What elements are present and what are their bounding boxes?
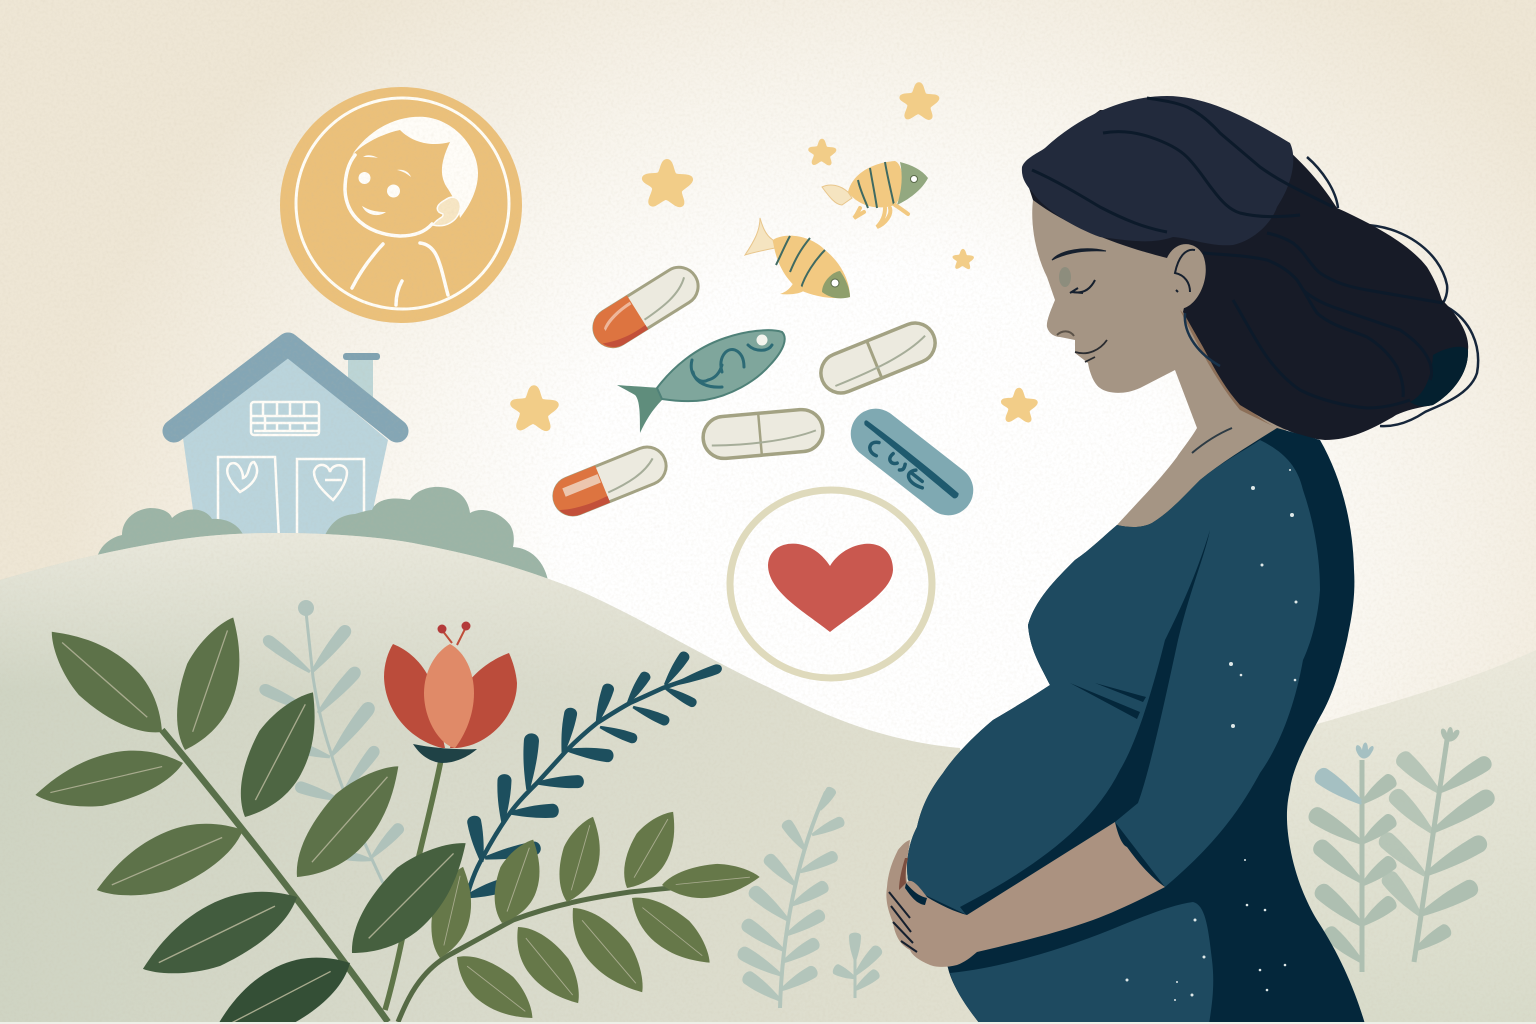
- stripes: [858, 162, 894, 208]
- flower stem: [385, 760, 441, 1010]
- hair bun dark end: [1410, 347, 1468, 406]
- earring: [1185, 313, 1220, 366]
- pregnant woman: [886, 96, 1478, 1024]
- left foreground hill: [0, 533, 1000, 1024]
- attic window: [251, 402, 319, 435]
- fish body: [657, 330, 785, 401]
- baby shoulders: [352, 243, 448, 305]
- body: [848, 161, 902, 207]
- bottom edge strip: [0, 1022, 1536, 1024]
- body: [773, 236, 850, 298]
- dress chest belly and sleeve: [907, 440, 1320, 915]
- collarbone: [1192, 428, 1232, 453]
- roof: [174, 344, 397, 431]
- left petal: [384, 644, 445, 748]
- blue pill: [841, 399, 983, 525]
- thumb shadow: [905, 883, 927, 905]
- dress dark sleeve fold: [960, 530, 1210, 916]
- fish gill marks: [691, 345, 772, 387]
- neck and face: [1032, 200, 1290, 540]
- hill crest highlight: [0, 533, 770, 690]
- house wall: [183, 356, 388, 560]
- back hair: [1022, 110, 1468, 440]
- right door with heart: [297, 459, 364, 540]
- right bush: [323, 487, 549, 590]
- white capsule middle: [701, 408, 825, 460]
- green fish: [617, 330, 785, 433]
- dress lower panel: [950, 902, 1213, 1024]
- tail fins: [745, 218, 775, 255]
- hair strand lines: [1032, 98, 1443, 408]
- dress sparkles: [1126, 469, 1298, 1001]
- ear inner line: [1175, 250, 1195, 292]
- striped fish lower: [745, 218, 850, 298]
- olive branch right: [398, 802, 761, 1024]
- closed eye: [1070, 280, 1095, 293]
- ear: [1167, 244, 1206, 309]
- forehead smudge: [1059, 267, 1071, 287]
- neck shadow: [1180, 310, 1277, 428]
- house on hill: [174, 344, 397, 560]
- orange capsule upper: [585, 259, 706, 355]
- heart in circle: [730, 490, 932, 678]
- baby hair: [352, 117, 478, 218]
- center petal: [424, 644, 474, 748]
- small bottom fern: [831, 933, 884, 998]
- legs: [854, 205, 908, 227]
- fish eye: [756, 334, 768, 346]
- nose line: [1057, 331, 1074, 336]
- front hair: [1022, 96, 1293, 245]
- flower stamens: [442, 627, 466, 645]
- baby face features: [358, 155, 411, 215]
- teal sprig: [463, 650, 723, 904]
- white capsule right: [815, 317, 941, 399]
- tail fins: [822, 185, 852, 205]
- fern behind flower: [257, 600, 406, 883]
- sun medallion with baby: [280, 87, 522, 323]
- back of hand shade: [899, 858, 908, 890]
- loose hair strands: [1307, 157, 1478, 426]
- right fern pair: [1305, 727, 1498, 972]
- finger lines: [889, 892, 917, 952]
- belly fold lines: [1070, 683, 1146, 719]
- fish tail: [617, 385, 662, 433]
- forearm and hand: [886, 822, 1165, 967]
- baby head outline: [345, 155, 432, 236]
- orange capsule lower: [547, 440, 672, 522]
- head: [822, 271, 850, 298]
- stripes: [776, 236, 825, 288]
- striped fish upper: [822, 161, 928, 227]
- bottom center fern: [735, 785, 846, 1008]
- left door with heart: [218, 457, 279, 540]
- right background hill: [1280, 650, 1536, 1024]
- fin: [780, 280, 805, 294]
- eyebrow: [1052, 249, 1106, 260]
- calyx: [413, 744, 477, 763]
- dress dark base: [907, 428, 1365, 1024]
- smile: [1075, 340, 1107, 362]
- head: [897, 162, 928, 205]
- chimney cap: [343, 353, 380, 360]
- baby ear: [433, 197, 460, 226]
- right petal: [450, 653, 517, 748]
- left bush: [97, 508, 247, 570]
- stars: [512, 84, 1036, 429]
- olive branch left: [30, 608, 486, 1024]
- red tulip flower: [384, 622, 517, 763]
- chimney: [348, 358, 373, 408]
